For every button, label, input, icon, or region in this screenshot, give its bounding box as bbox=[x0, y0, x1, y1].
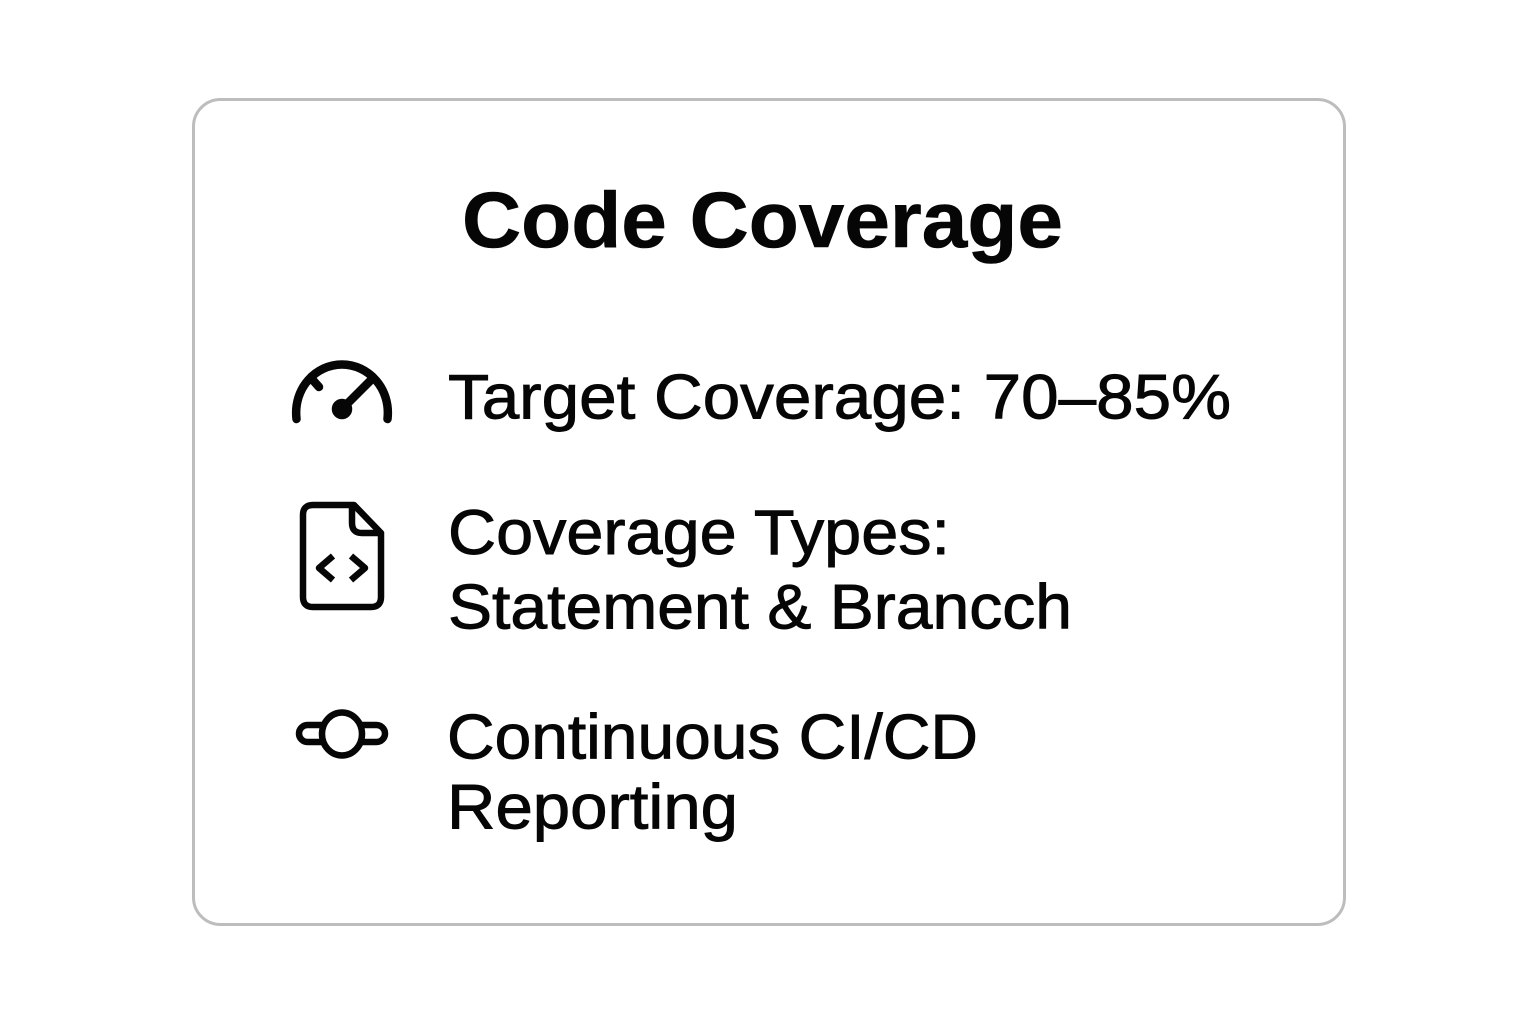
icon: pipeline connector bbox=[299, 712, 385, 756]
icon: code file bbox=[303, 505, 381, 607]
text: coverage types bbox=[448, 498, 1072, 642]
text: coverage types: Statement & Brancch bbox=[448, 572, 1072, 642]
text: continuous reporting: Reporting bbox=[447, 772, 738, 842]
text: continuous reporting bbox=[447, 702, 978, 842]
panel: code coverage card bbox=[194, 100, 1344, 924]
text: target coverage: Target Coverage: 70–85% bbox=[448, 362, 1231, 432]
text: continuous reporting: Continuous CI/CD bbox=[447, 702, 978, 772]
text: coverage types: Coverage Types: bbox=[448, 498, 950, 568]
title: Code Coverage bbox=[462, 175, 1063, 264]
icon: gauge bbox=[296, 364, 388, 419]
